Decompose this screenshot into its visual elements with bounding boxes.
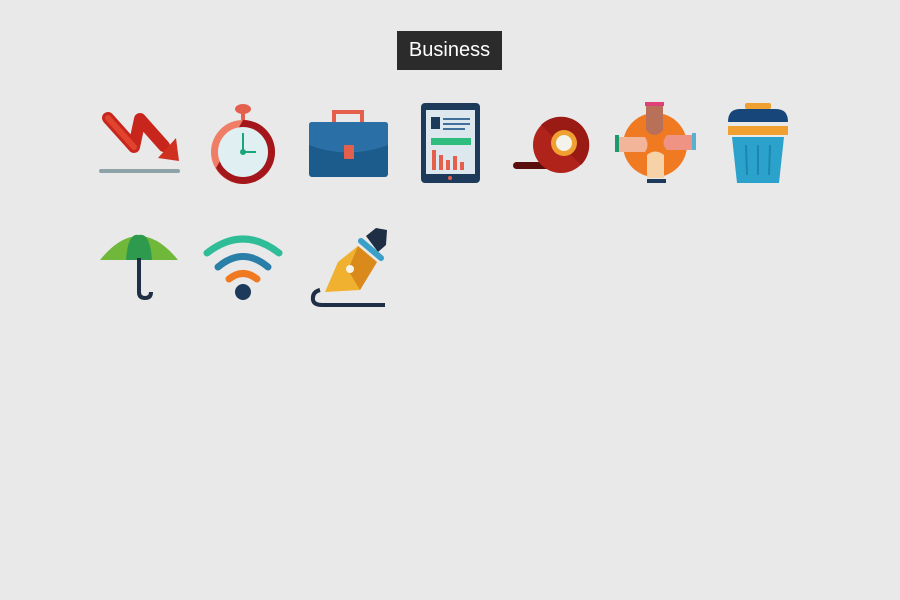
- icon: wifi: [207, 239, 279, 300]
- icon: tablet report: [421, 103, 480, 183]
- icon: briefcase: [309, 112, 388, 177]
- icon: downward trend arrow: [99, 118, 180, 173]
- icon: trash bin: [728, 103, 788, 183]
- icon: umbrella: [100, 235, 178, 298]
- icon: tape roll: [513, 117, 589, 173]
- title: Business: [409, 39, 490, 61]
- icon: fountain pen: [313, 228, 387, 305]
- icon: teamwork hands: [615, 102, 696, 183]
- icon: stopwatch: [211, 104, 275, 184]
- title: [397, 31, 502, 70]
